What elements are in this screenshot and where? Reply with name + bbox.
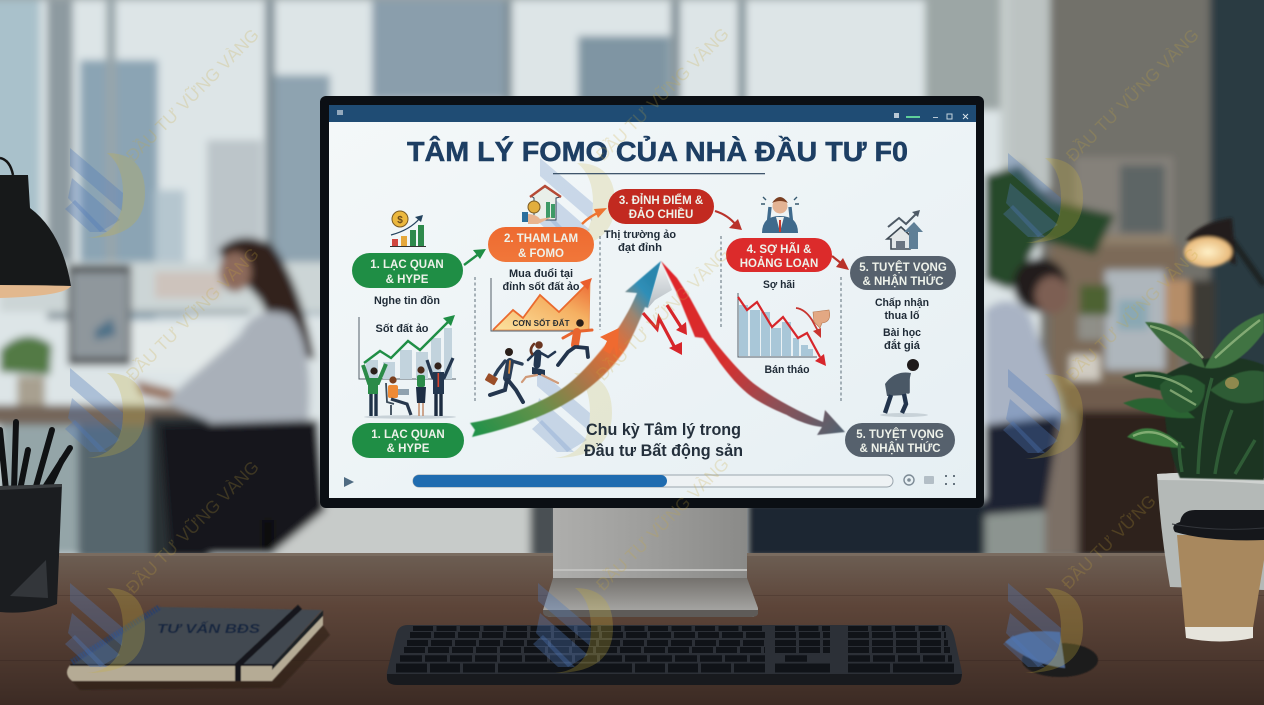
potted plant: [1122, 313, 1264, 590]
step 1 top pill: & HYPE: [386, 274, 429, 286]
step 1 bottom pill: & HYPE: [387, 443, 430, 455]
step 4 pill: [726, 238, 832, 272]
step 5 top pill: & NHẬN THỨC: [862, 275, 944, 288]
step 5 bottom pill: [845, 423, 955, 457]
keyboard: [387, 625, 962, 685]
running man in orange: [558, 319, 592, 365]
step 2 pill: [488, 227, 594, 262]
label: accept losses: Chấp nhận: [875, 297, 929, 309]
man in suit: [427, 358, 453, 416]
watermark logos: [65, 148, 1083, 673]
label: mua duoi: [502, 268, 580, 293]
arrow 4 to 5: [832, 256, 849, 270]
seated person: [386, 376, 411, 415]
running woman: [522, 341, 558, 383]
video controls: [344, 475, 955, 487]
watermark text: ĐẦU TƯ VỮNG VÀNG: [121, 24, 263, 166]
label: accept losses: đắt giá: [884, 339, 921, 352]
man right: [1013, 258, 1067, 312]
person in green raising arms: [363, 364, 386, 416]
label: mua duoi: đỉnh sốt đất ảo: [502, 281, 580, 293]
watermark text: ĐẦU TƯ VỮNG VÀNG: [591, 453, 733, 595]
watermark logo on screen: [535, 158, 615, 248]
chart: land fever: [491, 278, 592, 331]
screen panel: [329, 105, 976, 498]
woman: [218, 238, 315, 360]
lower centre: [275, 500, 535, 560]
big rising arrow: [470, 261, 661, 437]
label: nghe tin don: Nghe tin đồn: [374, 295, 440, 307]
coffee cup: [1172, 510, 1264, 642]
label: accept losses: [875, 297, 929, 352]
foliage: [1122, 313, 1264, 480]
step 3 pill: ĐẢO CHIỀU: [629, 208, 693, 221]
watermark text: ĐẦU TƯ VỮNG VÀNG: [121, 243, 263, 385]
icon: worried investor: [761, 197, 799, 233]
step 1 top pill: [352, 253, 463, 288]
icon: houses and arrow: [887, 210, 923, 249]
notebook: TƯ VẤN BĐS: [157, 621, 261, 636]
standing woman: [416, 366, 426, 416]
arrow 2 to 3: [582, 208, 607, 224]
runner with briefcase: [485, 348, 523, 402]
monitor bezel: [320, 96, 984, 508]
watermark text: ĐẦU TƯ VỮNG VÀNG: [591, 243, 733, 385]
caption: Đầu tư Bất động sản: [584, 441, 743, 460]
chart: falling market: [738, 293, 830, 366]
watermark text: [121, 23, 1203, 598]
window title bar: [329, 105, 976, 122]
title: TÂM LÝ FOMO CỦA NHÀ ĐẦU TƯ F0: [407, 135, 908, 167]
figure: defeated man: [880, 359, 928, 417]
mouse: [1005, 631, 1098, 677]
step 2 pill: & FOMO: [518, 248, 564, 260]
watermark text: ĐẦU TƯ VỮNG VÀNG: [121, 456, 263, 598]
step 5 bottom pill: & NHẬN THỨC: [859, 442, 941, 455]
step 5 top pill: [850, 256, 956, 290]
icon: house and money: [522, 186, 561, 224]
watermark text: ĐẦU TƯ VỮNG VÀNG: [591, 23, 733, 165]
right lamp: [1184, 218, 1264, 285]
step 3 pill: 3. ĐỈNH ĐIỂM &: [619, 194, 703, 207]
left monitor + desk: [68, 265, 131, 365]
pot: [1157, 473, 1264, 590]
watermark logo lower on screen: [532, 368, 612, 458]
arrow 3 to 4: [715, 211, 742, 230]
label: accept losses: Bài học: [883, 327, 921, 339]
step 4 pill: HOẢNG LOẠN: [740, 257, 818, 270]
small red drop arrows: [643, 305, 687, 355]
step 2 pill: 2. THAM LAM: [504, 233, 578, 245]
label: accept losses: thua lố: [884, 310, 920, 322]
runners: [485, 319, 592, 402]
icon: coin and bars: [390, 211, 426, 247]
step 1 bottom pill: 1. LẠC QUAN: [371, 429, 445, 441]
team figures: [363, 358, 456, 419]
fold between arrows: [648, 262, 672, 308]
step 1 top pill: 1. LẠC QUAN: [370, 259, 444, 271]
watermark text: ĐẦU TƯ VỮNG VÀNG: [1061, 24, 1203, 166]
label: mua duoi: Mua đuổi tại: [509, 268, 573, 280]
step 4 pill: 4. SỢ HÃI &: [747, 243, 811, 256]
step 5 top pill: 5. TUYỆT VỌNG: [859, 261, 947, 274]
label: market peak: Thị trường ảo: [604, 229, 676, 241]
pen holder: [0, 422, 70, 613]
big falling arrow: [661, 261, 845, 435]
notebook: [67, 607, 330, 690]
dotted column dividers: [475, 236, 841, 402]
label: fear: Sợ hãi: [763, 279, 795, 291]
left desk lamp: [0, 158, 71, 298]
label: market peak: đạt đỉnh: [618, 242, 662, 254]
label: market peak: [604, 229, 676, 254]
step 3 pill: [608, 189, 714, 224]
watermark text: ĐẦU TƯ VỮNG: [1057, 490, 1160, 593]
monitor stand: [543, 505, 758, 617]
chart: rising market: Sốt đất ảo: [376, 323, 429, 335]
step 1 bottom pill: [352, 423, 464, 458]
desk surface: [0, 553, 1264, 705]
step 5 bottom pill: 5. TUYỆT VỌNG: [856, 428, 944, 441]
label: sell-off: Bán tháo: [764, 364, 810, 376]
arrow 1 to 2: [464, 249, 486, 265]
small orange arrow on curve: [600, 328, 619, 357]
caption: Chu kỳ Tâm lý trong: [586, 420, 741, 439]
watermark text: ĐẦU TƯ VỮNG VÀNG: [1061, 243, 1203, 385]
chart: land fever: CƠN SỐT ĐẤT: [512, 318, 570, 328]
icon: coin and bars: $: [397, 215, 403, 226]
chart: rising market: [359, 315, 456, 379]
caption: [584, 420, 743, 460]
